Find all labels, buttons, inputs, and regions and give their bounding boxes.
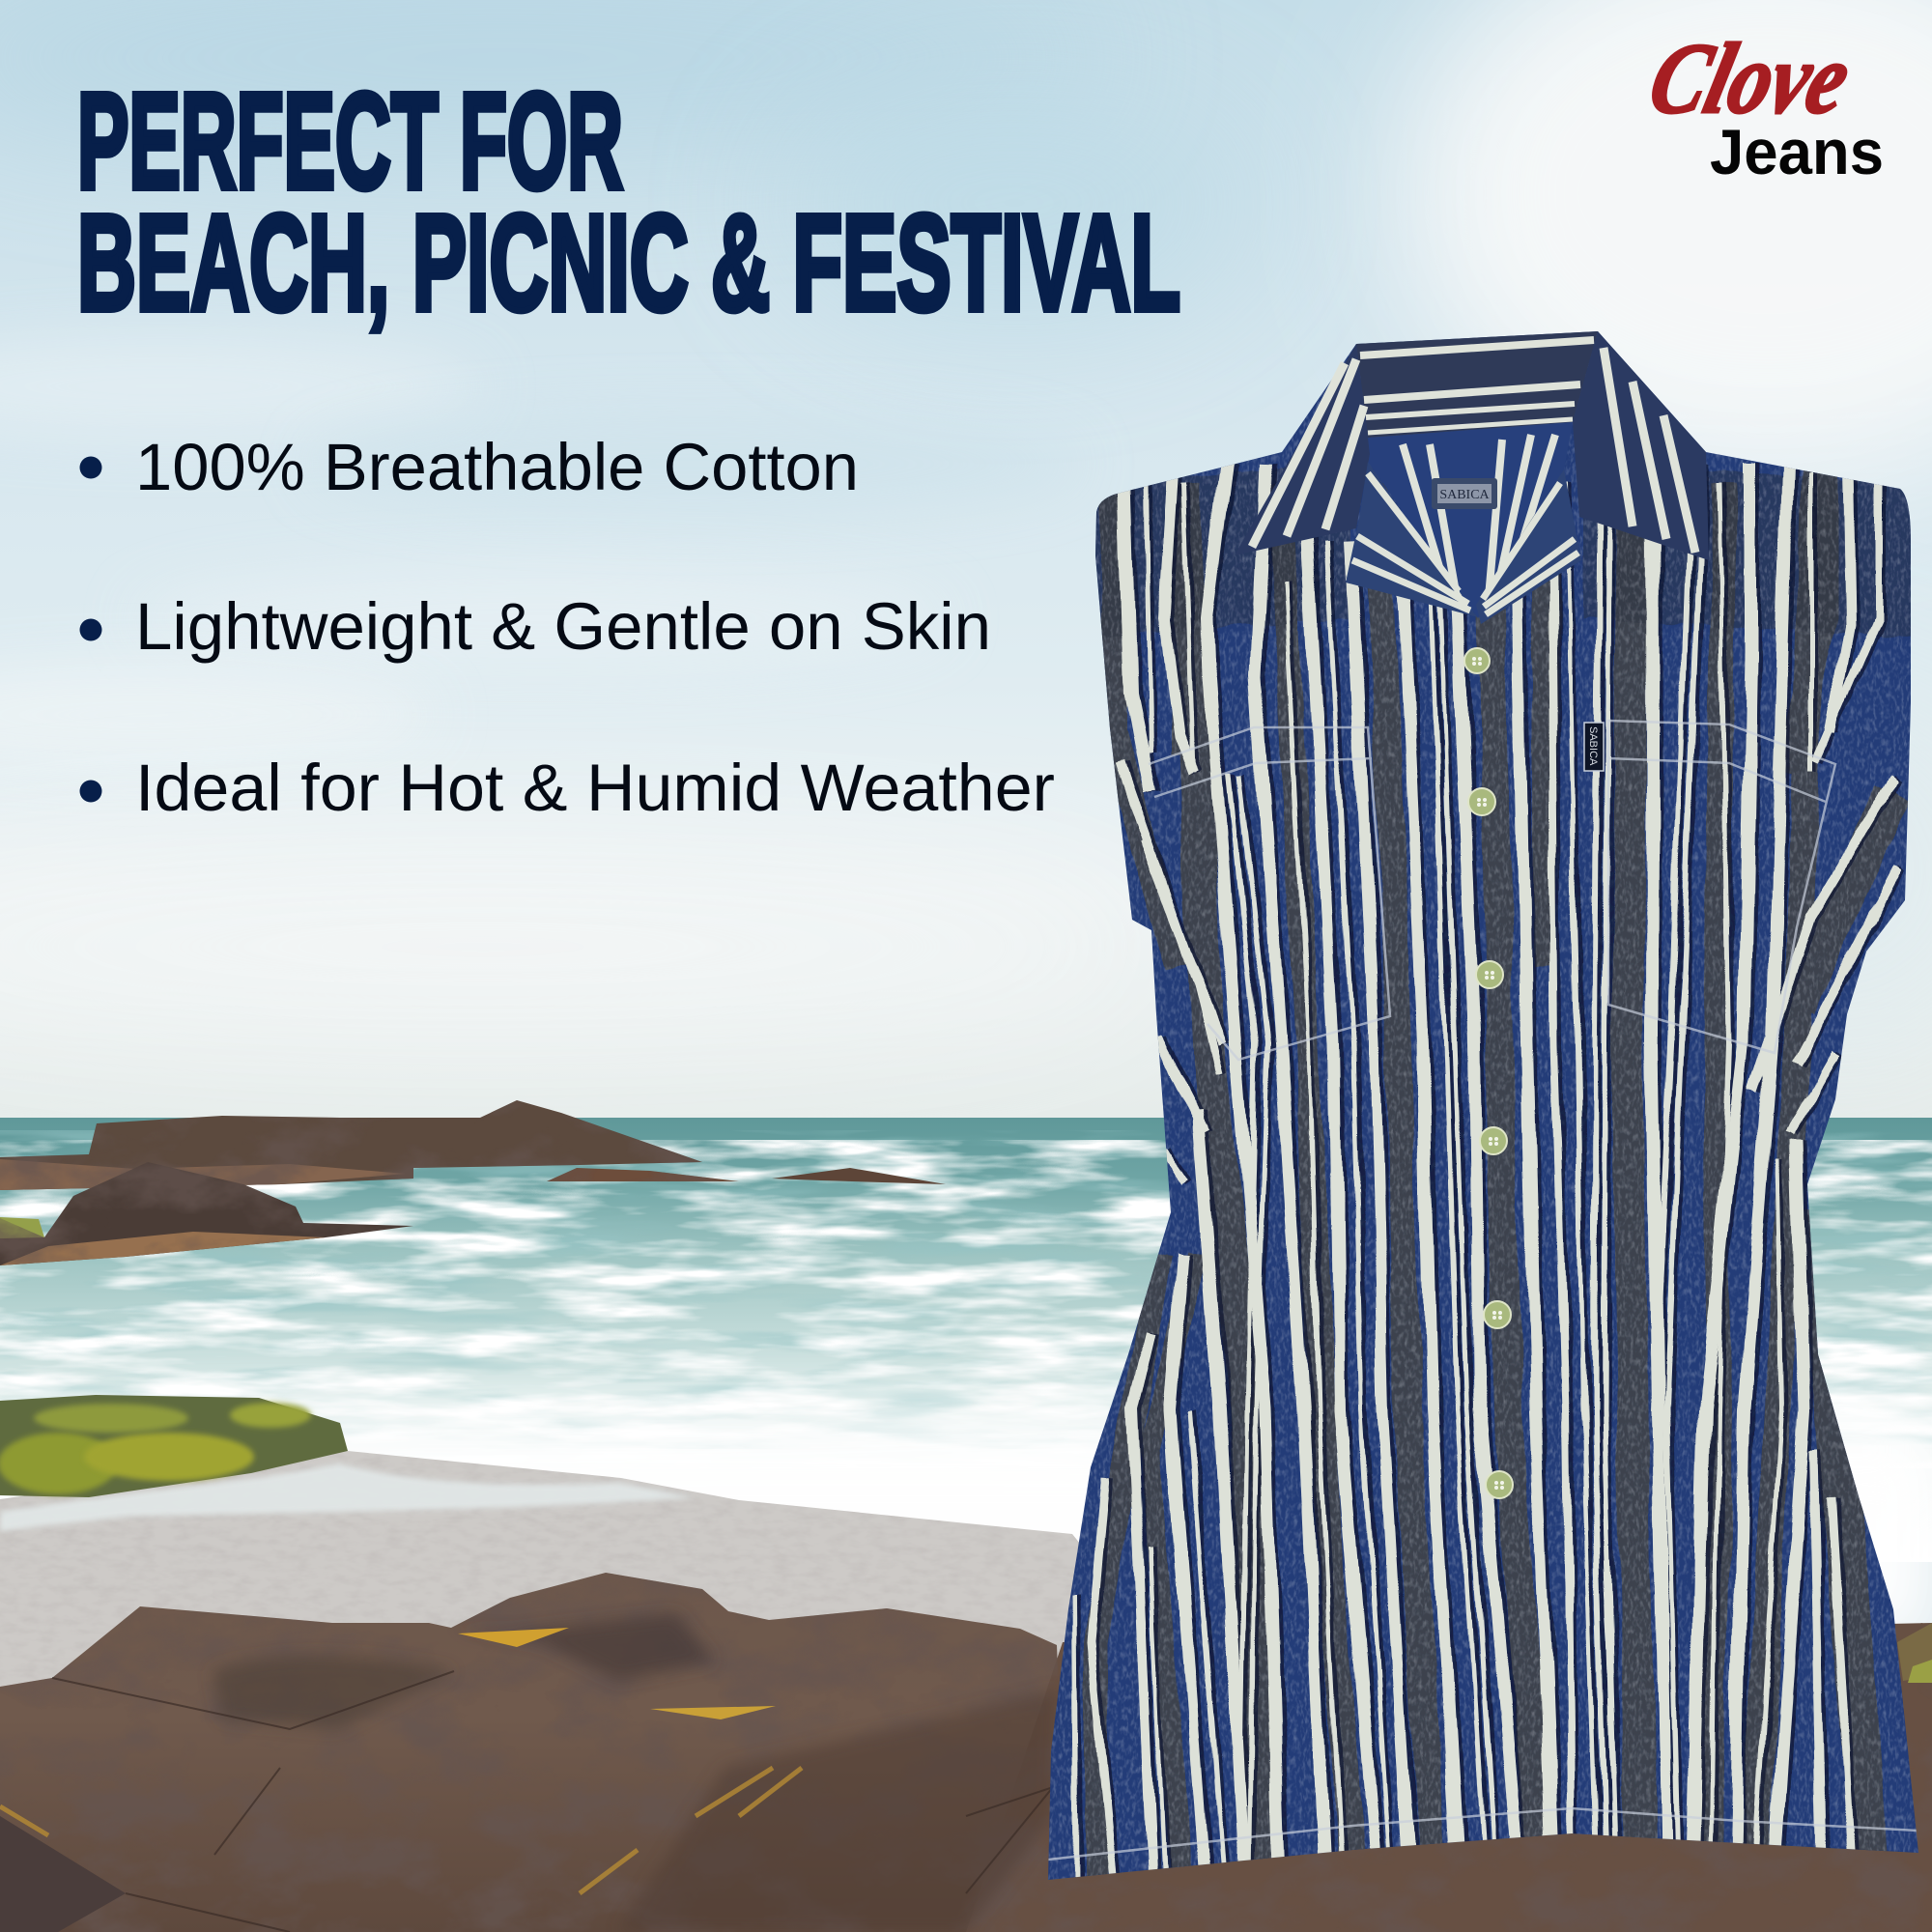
shirt back collar — [1356, 331, 1598, 438]
bullet 2: Lightweight & Gentle on Skin — [135, 589, 991, 664]
title: PERFECT FOR — [77, 64, 623, 216]
right lapel — [1476, 469, 1581, 624]
background: sky — [0, 0, 1932, 1121]
distant rocks — [0, 1092, 946, 1275]
mossy rock — [0, 1395, 348, 1497]
bullet list — [79, 430, 1055, 825]
left lapel — [1346, 462, 1478, 617]
shirt placket tag: SABICA — [1587, 726, 1599, 766]
background: sea and surf — [0, 1118, 1932, 1642]
title: BEACH, PICNIC & FESTIVAL — [77, 185, 1180, 338]
left collar wing — [1235, 344, 1370, 555]
title — [77, 64, 1180, 338]
right collar wing — [1573, 331, 1709, 560]
brand logo — [1639, 22, 1884, 187]
bullet 1: 100% Breathable Cotton — [135, 430, 859, 504]
foreground rocks — [0, 1565, 1932, 1932]
background: wet sand — [0, 1451, 1079, 1687]
shirt placket tag — [1584, 723, 1604, 771]
neck label: SABICA — [1439, 488, 1491, 502]
brand logo: Jeans — [1710, 116, 1884, 187]
striped sleeveless shirt — [1043, 328, 1922, 1893]
dark shoulder shading — [1092, 464, 1918, 638]
brand logo: Clove — [1639, 22, 1861, 134]
bullet 3: Ideal for Hot & Humid Weather — [135, 751, 1055, 825]
neck label — [1432, 478, 1497, 509]
pocket stitching — [1149, 721, 1835, 1060]
shirt buttons — [1464, 648, 1513, 1498]
shallow water foam — [0, 1463, 696, 1531]
shirt inner neck — [1368, 422, 1573, 618]
hem stitching — [1048, 1808, 1918, 1860]
